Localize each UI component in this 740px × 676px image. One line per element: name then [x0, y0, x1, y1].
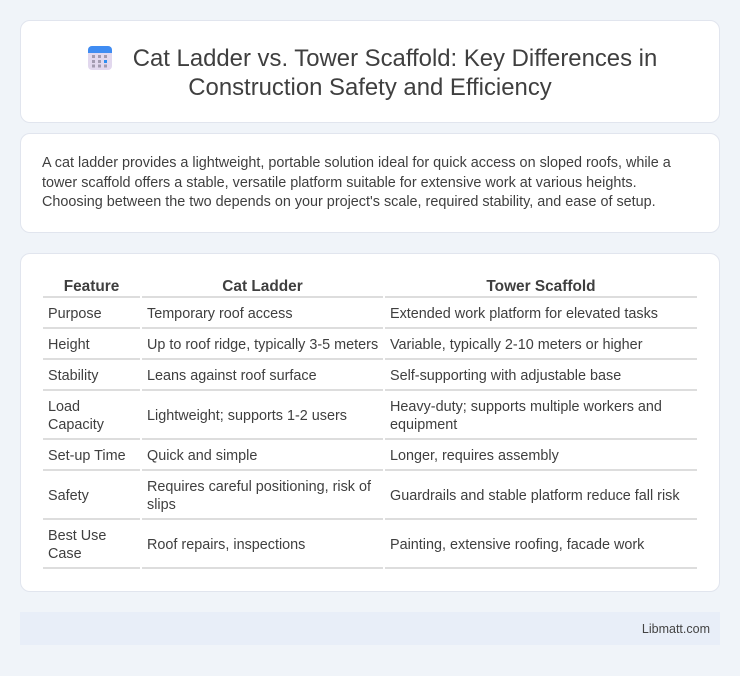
- panel: introduction: [20, 133, 720, 233]
- panel: comparison table: [20, 253, 720, 592]
- table header row: Cat Ladder: [222, 278, 303, 295]
- row: set-up time: [43, 448, 697, 471]
- row: purpose: Temporary roof access: [147, 306, 293, 322]
- footer: Libmatt.com: [642, 622, 710, 636]
- row: load capacity: Heavy-duty; supports multiple workers and: [390, 398, 662, 414]
- row: purpose: [43, 306, 697, 329]
- text block: introduction: tower scaffold offers a stable, versatile platform suitable for extensive work at various heights.: [42, 174, 637, 190]
- row: load capacity: [43, 398, 697, 440]
- row: stability: Self-supporting with adjustable base: [390, 368, 621, 384]
- row: height: Variable, typically 2-10 meters or higher: [390, 336, 642, 352]
- row: best use case: Roof repairs, inspections: [147, 536, 305, 552]
- panel: header: [20, 20, 720, 123]
- title: Cat Ladder vs. Tower Scaffold: Key Differences in: [133, 45, 657, 72]
- comparison table: [43, 278, 697, 569]
- row: purpose: Purpose: [48, 306, 102, 322]
- row: safety: Requires careful positioning, risk of: [147, 478, 371, 494]
- row: stability: [43, 368, 697, 391]
- row: best use case: Painting, extensive roofing, facade work: [390, 536, 644, 552]
- row: stability: Stability: [48, 368, 98, 384]
- row: set-up time: Quick and simple: [147, 448, 257, 464]
- row: height: Height: [48, 336, 90, 352]
- table header row: Feature: [64, 278, 119, 295]
- row: purpose: Extended work platform for elevated tasks: [390, 306, 658, 322]
- text block: introduction: A cat ladder provides a lightweight, portable solution ideal for quick access on sloped roofs, while a: [42, 155, 671, 171]
- row: stability: Leans against roof surface: [147, 368, 317, 384]
- row: safety: slips: [147, 496, 176, 512]
- row: safety: [43, 478, 697, 520]
- row: best use case: Best Use: [48, 528, 106, 544]
- row: safety: Guardrails and stable platform reduce fall risk: [390, 488, 680, 504]
- row: load capacity: Lightweight; supports 1-2 users: [147, 408, 347, 424]
- row: set-up time: Longer, requires assembly: [390, 448, 559, 464]
- row: safety: Safety: [48, 488, 89, 504]
- table header row: [43, 278, 697, 298]
- row: load capacity: Load: [48, 398, 80, 414]
- row: height: [43, 336, 697, 360]
- footer: [20, 612, 720, 645]
- row: load capacity: equipment: [390, 416, 457, 432]
- text block: introduction: Choosing between the two depends on your project's scale, required stability, and ease of setup.: [42, 194, 656, 210]
- table header row: Tower Scaffold: [486, 278, 596, 295]
- row: height: Up to roof ridge, typically 3-5 meters: [147, 336, 378, 352]
- row: set-up time: Set-up Time: [48, 448, 126, 464]
- icon: calendar: [88, 46, 112, 70]
- row: load capacity: Capacity: [48, 416, 104, 432]
- row: best use case: Case: [48, 546, 82, 562]
- text block: introduction: [42, 155, 671, 210]
- title: Construction Safety and Efficiency: [188, 74, 552, 101]
- row: best use case: [43, 528, 697, 569]
- title: [133, 45, 657, 101]
